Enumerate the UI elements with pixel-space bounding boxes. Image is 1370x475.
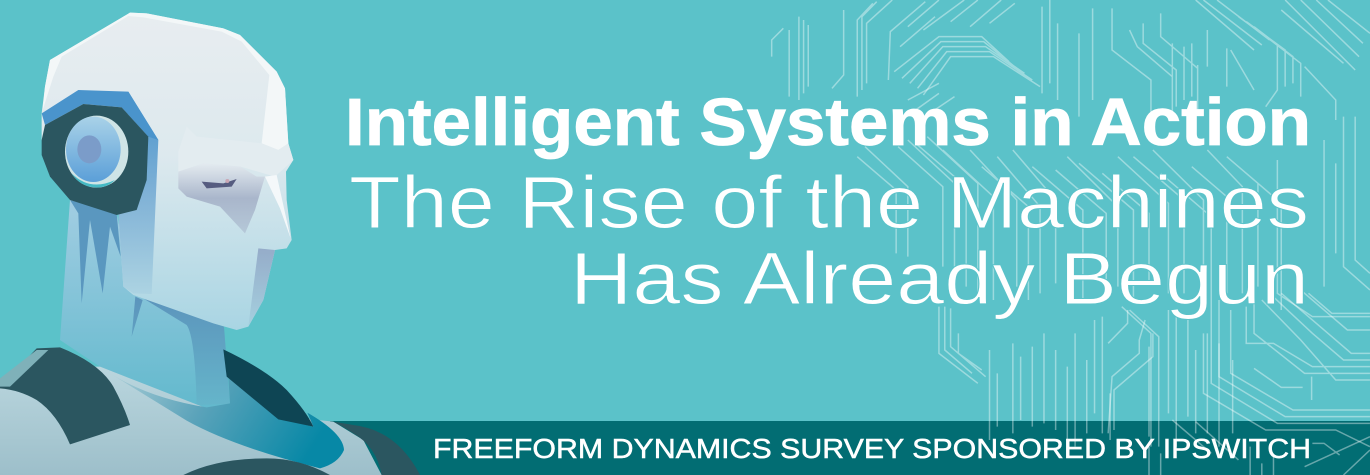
robot	[0, 13, 420, 475]
robot neck	[60, 200, 230, 408]
eye	[202, 179, 237, 188]
neck shadows	[70, 200, 121, 303]
nose highlight	[265, 175, 291, 238]
robot body	[0, 367, 382, 475]
dark right shoulder	[223, 349, 313, 427]
title	[345, 85, 1311, 320]
under nose shadow	[248, 248, 275, 327]
footer band	[330, 421, 1370, 475]
dark left shoulder	[0, 347, 130, 444]
ear dark	[42, 104, 148, 215]
helmet highlights	[43, 13, 288, 150]
shoulder highlight	[0, 350, 48, 387]
helmet	[42, 13, 293, 330]
chest dark	[183, 458, 330, 475]
right arm dark	[333, 422, 420, 475]
side panel	[118, 92, 158, 294]
heading: line two: The Rise of the Machines	[349, 161, 1309, 244]
collar	[110, 373, 344, 468]
heading: line three: Has Already Begun	[570, 237, 1309, 320]
blue ear trim	[42, 90, 158, 140]
ear disc	[65, 116, 128, 188]
circuit pattern	[772, 0, 1370, 475]
footer text: FREEFORM DYNAMICS SURVEY SPONSORED BY IPSWITCH	[433, 433, 1311, 464]
heading: bold line: Intelligent Systems in Action	[345, 85, 1311, 160]
eye socket	[178, 163, 265, 233]
brow	[152, 80, 293, 177]
